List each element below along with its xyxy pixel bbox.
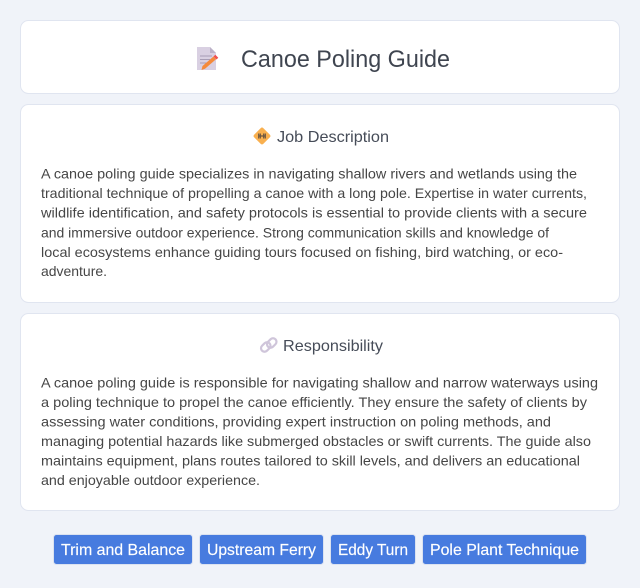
text block: job description	[40, 166, 587, 279]
text block: responsibility: a poling technique to propel the canoe efficiently. They ensure the safety of clients by	[41, 394, 587, 410]
text block: responsibility: A canoe poling guide is responsible for navigating shallow and narrow waterways using	[41, 374, 598, 390]
text block: job description: A canoe poling guide specializes in navigating shallow rivers and wetlands using the	[41, 166, 577, 182]
tag: upstream ferry: Upstream Ferry	[207, 542, 316, 559]
tag: eddy turn: Eddy Turn	[338, 542, 408, 559]
text block: job description: traditional technique of propelling a canoe with a long pole. Expertise in water currents,	[41, 185, 587, 201]
panel: header	[20, 20, 620, 94]
tag: trim and balance	[54, 534, 192, 564]
tag: pole plant technique: Pole Plant Technique	[430, 542, 579, 559]
text block: responsibility: managing potential hazards like submerged obstacles or swift currents. The guide also	[41, 433, 591, 449]
icon: memo with pencil	[197, 47, 218, 70]
icon: chain link	[260, 337, 278, 353]
tag: trim and balance: Trim and Balance	[61, 542, 185, 559]
icon: construction diamond	[253, 127, 271, 145]
heading: job description: Job Description	[277, 129, 389, 146]
panel: job description	[20, 104, 620, 302]
title: Canoe Poling Guide	[241, 46, 450, 73]
text block: job description: and immersive outdoor experience. Strong communication skills and knowledge of	[41, 224, 549, 240]
tag: pole plant technique	[422, 534, 586, 564]
text block: job description: wildlife identification, and safety protocols is essential to provide clients with a secure	[40, 204, 587, 220]
tag: upstream ferry	[200, 534, 324, 564]
text block: responsibility: assessing water conditions, providing expert instruction on poling methods, and	[41, 414, 551, 430]
text block: job description: local ecosystems enhance guiding tours focused on fishing, bird watching, or eco-	[41, 244, 563, 260]
text block: job description: adventure.	[41, 263, 107, 279]
tag: eddy turn	[330, 534, 416, 564]
text block: responsibility	[41, 374, 598, 488]
text block: responsibility: maintains equipment, plans routes tailored to skill levels, and delivers an educational	[41, 452, 580, 468]
tags row	[54, 534, 586, 564]
heading: responsibility: Responsibility	[283, 338, 383, 355]
panel: responsibility	[20, 314, 620, 510]
text block: responsibility: and enjoyable outdoor experience.	[41, 472, 260, 488]
